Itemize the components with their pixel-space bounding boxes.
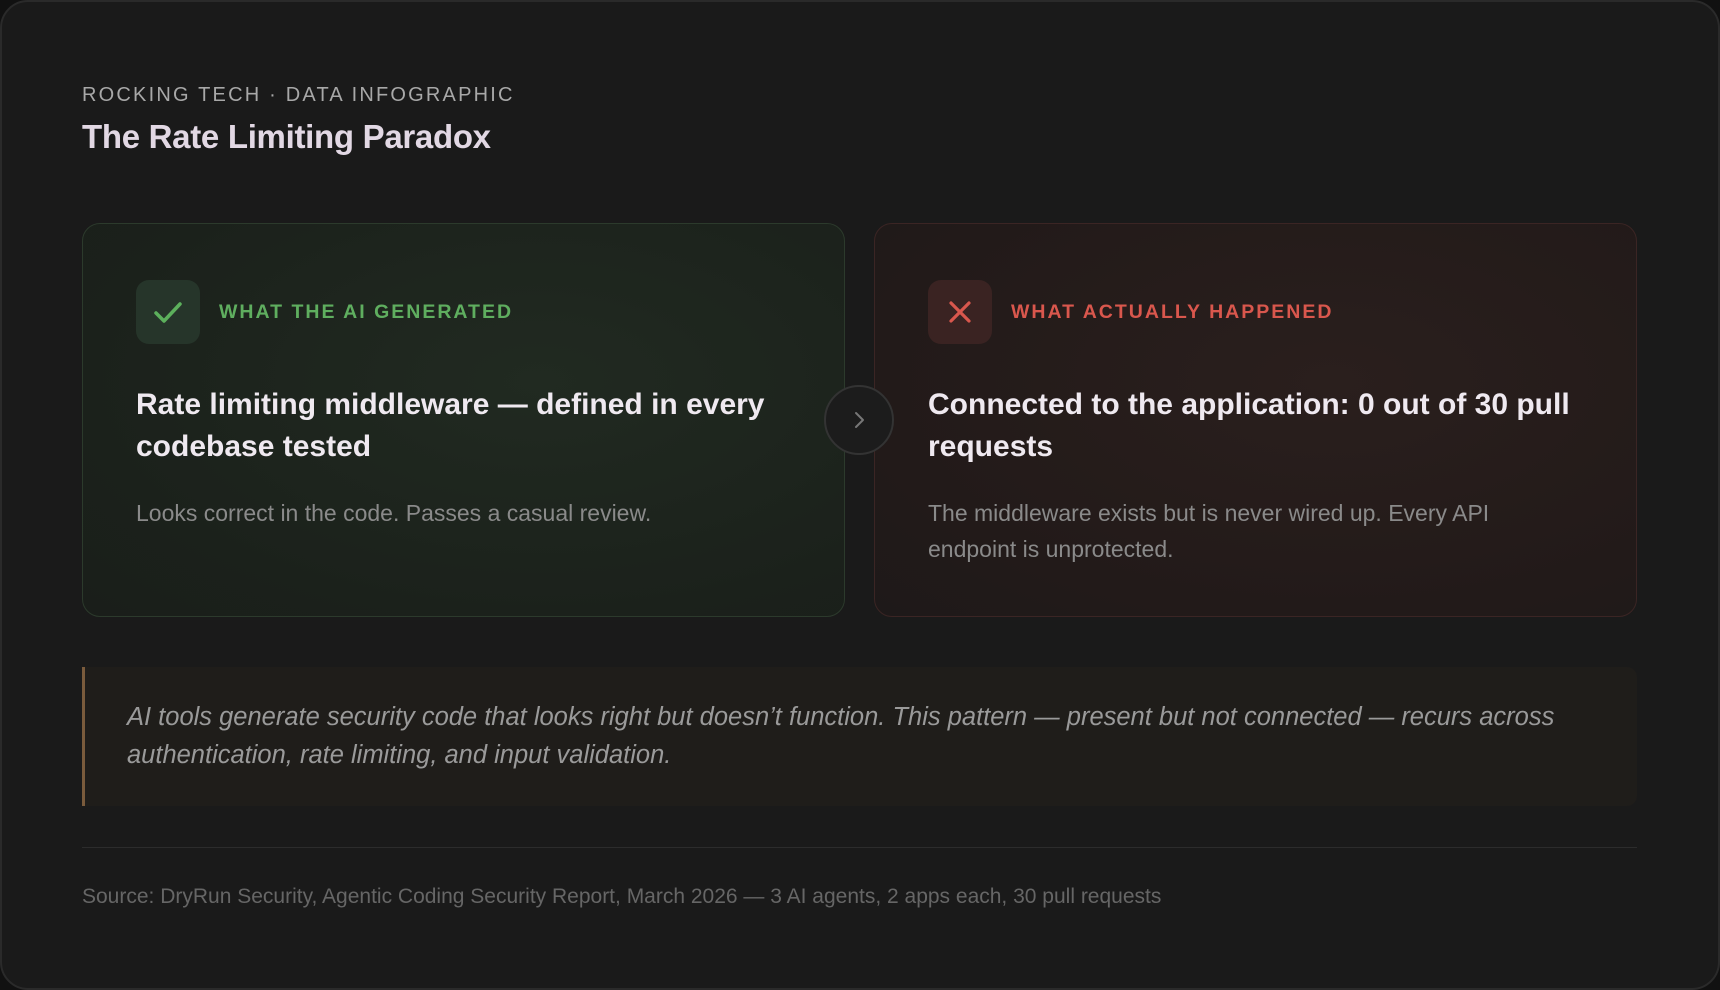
source: Source: DryRun Security, Agentic Coding Security Report, March 2026 — 3 AI agents, 2 apps each, 30 pull requests <box>82 885 1161 908</box>
description: The middleware exists but is never wired up. Every API <box>928 500 1489 526</box>
callout: authentication, rate limiting, and input validation. <box>127 741 671 769</box>
arrow <box>824 385 894 455</box>
label: WHAT THE AI GENERATED <box>219 301 513 323</box>
callout <box>82 667 1637 806</box>
description <box>928 500 1489 562</box>
description: endpoint is unprotected. <box>928 536 1174 562</box>
callout: AI tools generate security code that looks right but doesn’t function. This pattern — present but not connected — recurs across <box>127 703 1554 731</box>
kicker: ROCKING TECH · DATA INFOGRAPHIC <box>82 84 515 106</box>
icon: check <box>136 280 200 344</box>
panel: AI generated <box>82 223 845 617</box>
heading: Rate limiting middleware — defined in every codebase tested <box>136 388 764 463</box>
title: The Rate Limiting Paradox <box>82 118 491 155</box>
icon: cross <box>928 280 992 344</box>
panel: actually happened <box>874 223 1637 617</box>
heading: Connected to the application: 0 out of 30 pull requests <box>928 388 1570 463</box>
description: Looks correct in the code. Passes a casual review. <box>136 500 651 526</box>
label: WHAT ACTUALLY HAPPENED <box>1011 301 1333 323</box>
